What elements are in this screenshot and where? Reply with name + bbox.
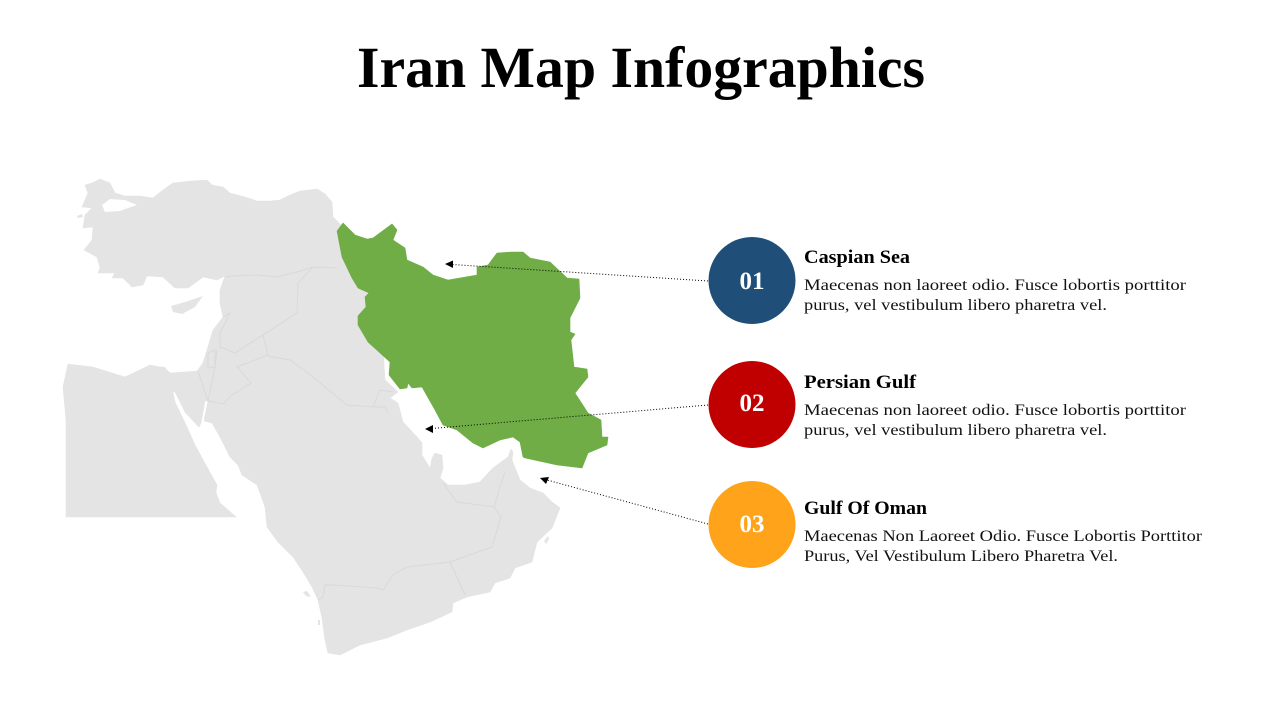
badge 02: 02 bbox=[740, 390, 764, 417]
description 03 bbox=[804, 528, 1203, 565]
heading: Persian Gulf: Persian Gulf bbox=[804, 372, 917, 393]
item 01: Caspian Sea bbox=[708, 237, 1187, 324]
Iran highlighted bbox=[337, 223, 608, 468]
badge 01 bbox=[708, 237, 796, 324]
heading: Caspian Sea: Caspian Sea bbox=[804, 247, 911, 268]
description 03: Purus, Vel Vestibulum Libero Pharetra Vel. bbox=[804, 548, 1118, 565]
region base map bbox=[63, 179, 560, 655]
description 02: purus, vel vestibulum libero pharetra vel. bbox=[804, 422, 1107, 439]
heading: Gulf Of Oman: Gulf Of Oman bbox=[804, 498, 927, 519]
arrow: Persian Gulf callout bbox=[425, 405, 708, 433]
description 01 bbox=[804, 277, 1187, 314]
title: Iran Map Infographics bbox=[357, 35, 925, 100]
description 02 bbox=[804, 402, 1187, 439]
description 01: purus, vel vestibulum libero pharetra vel. bbox=[804, 297, 1107, 314]
arrow: Caspian Sea callout bbox=[445, 260, 708, 281]
Cyprus bbox=[171, 296, 203, 314]
badge 01: 01 bbox=[740, 268, 764, 295]
item 03: Gulf Of Oman bbox=[708, 481, 1203, 568]
badge 03 bbox=[708, 481, 796, 568]
country borders bbox=[198, 267, 505, 600]
description 02: Maecenas non laoreet odio. Fusce lobortis porttitor bbox=[804, 402, 1187, 419]
Sea of Marmara bbox=[102, 199, 137, 212]
arrow: Gulf of Oman callout bbox=[540, 477, 708, 524]
description 03: Maecenas Non Laoreet Odio. Fusce Lobortis Porttitor bbox=[804, 528, 1203, 545]
small islands bbox=[77, 214, 549, 625]
item 02: Persian Gulf bbox=[708, 361, 1187, 448]
badge 03: 03 bbox=[740, 511, 764, 538]
description 01: Maecenas non laoreet odio. Fusce lobortis porttitor bbox=[804, 277, 1187, 294]
badge 02 bbox=[708, 361, 796, 448]
map of the Middle East bbox=[63, 179, 608, 655]
